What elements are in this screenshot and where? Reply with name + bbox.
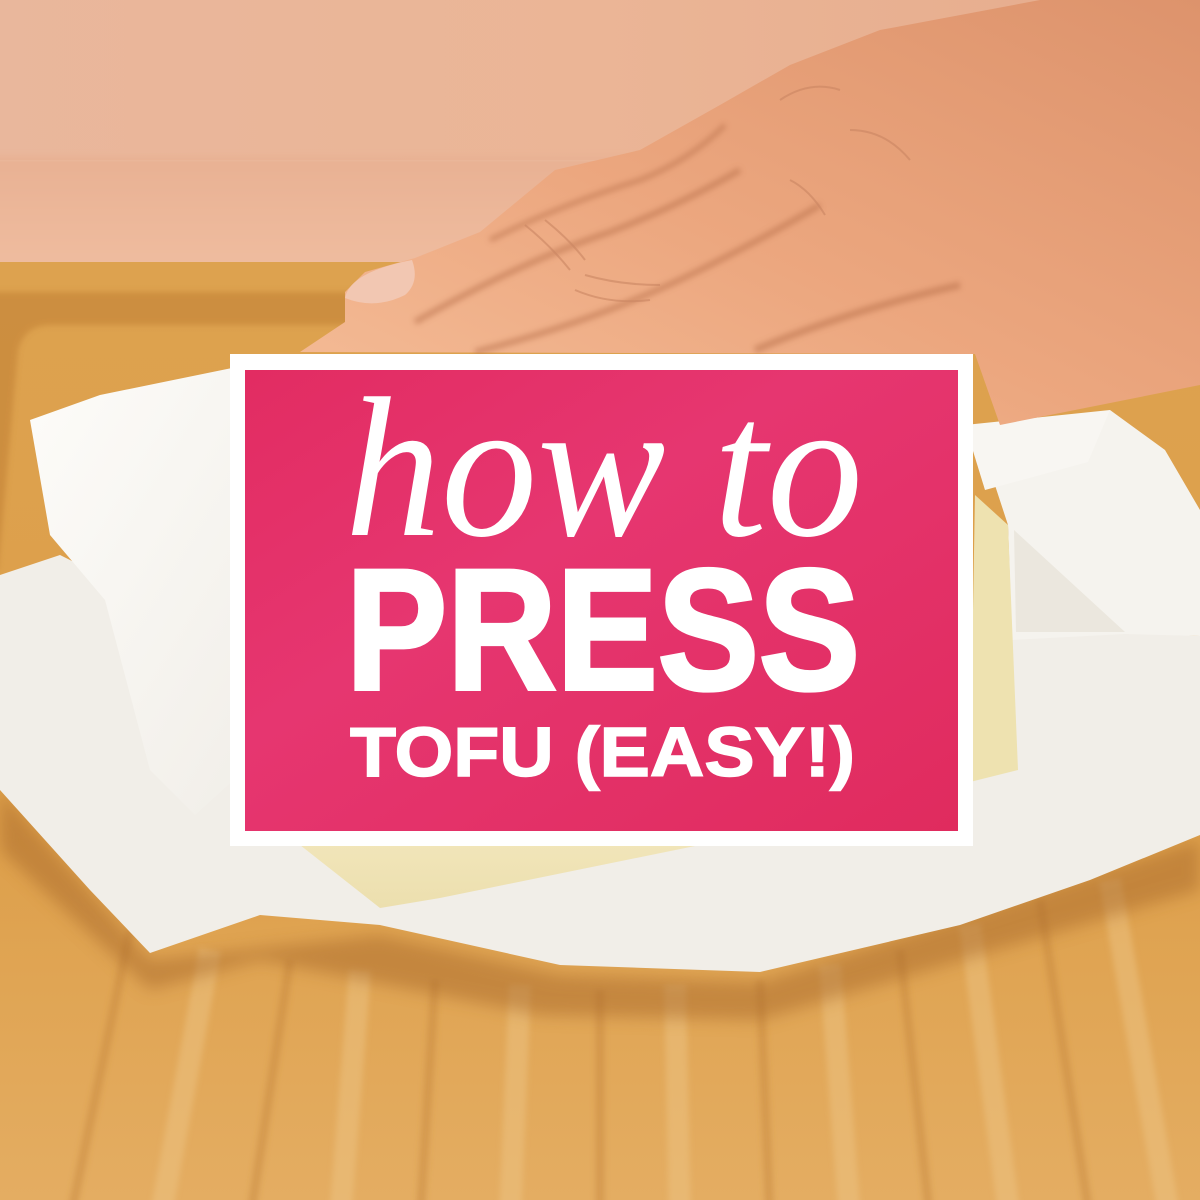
background: wall and ledge: [0, 0, 1200, 268]
fold shadow: [1014, 530, 1125, 632]
heading: how to: how to: [345, 358, 863, 579]
heading: PRESS: PRESS: [346, 534, 860, 726]
knuckle wrinkles: [525, 87, 910, 301]
hand pressing down: [300, 0, 1200, 425]
heading: TOFU (EASY!): TOFU (EASY!): [350, 713, 855, 791]
bamboo cutting board: [0, 262, 1200, 1200]
tofu block: [300, 495, 1018, 908]
title panel: [230, 354, 973, 846]
paper towel: bottom sheet: [0, 555, 1200, 972]
finger gaps: [415, 125, 960, 352]
fingernail: [345, 260, 415, 303]
paper towel: folded left wrap: [30, 368, 300, 815]
paper towel: folded right wrap: [965, 410, 1200, 640]
